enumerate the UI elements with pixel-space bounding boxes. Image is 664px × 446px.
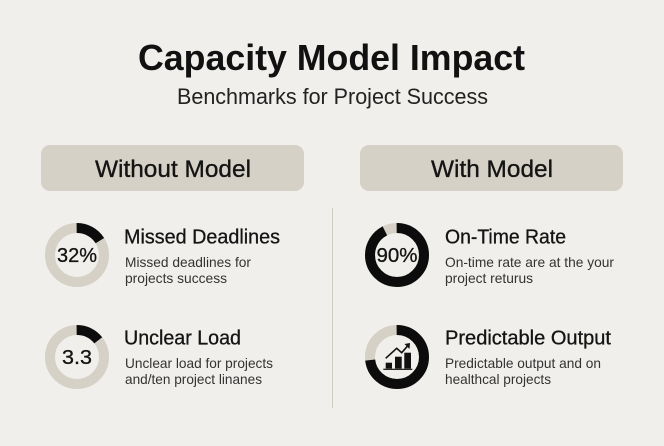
metric: Missed Deadlines: projects success: [125, 270, 227, 286]
metric: Predictable Output: [370, 328, 611, 387]
metric: On-Time Rate: On-Time Rate: [445, 226, 566, 248]
metric: Unclear Load: Unclear load for projects: [125, 355, 273, 371]
metric: Missed Deadlines: [50, 226, 280, 286]
metric: Predictable Output: Predictable Output: [445, 328, 611, 350]
metric: On-Time Rate: On-time rate are at the your: [445, 254, 614, 270]
icon: rising bar chart: [383, 343, 412, 370]
column header: With Model: [360, 145, 623, 191]
donut: 3.3: 3.3: [62, 347, 92, 369]
metric: Unclear Load: and/ten project linanes: [125, 371, 262, 387]
column header: With Model: With Model: [431, 156, 553, 183]
subtitle: Benchmarks for Project Success: [177, 84, 488, 109]
metric: On-Time Rate: [370, 226, 614, 286]
column header: Without Model: [41, 145, 304, 191]
column header: Without Model: Without Model: [95, 156, 251, 183]
donut: 3.3: [50, 330, 104, 384]
metric: Predictable Output: healthcal projects: [445, 371, 551, 387]
metric: Unclear Load: [50, 328, 273, 387]
donut: 32%: [50, 228, 104, 282]
metric: Predictable Output: Predictable output and on: [445, 355, 601, 371]
donut: 32%: 32%: [57, 245, 97, 267]
metric: Missed Deadlines: Missed deadlines for: [125, 254, 251, 270]
title: Capacity Model Impact: [138, 37, 525, 78]
donut: 90%: [370, 228, 424, 282]
metric: Missed Deadlines: Missed Deadlines: [124, 226, 280, 248]
metric: On-Time Rate: project returus: [445, 270, 533, 286]
donut: 90%: 90%: [376, 245, 418, 267]
donut: chart icon: [370, 330, 424, 384]
metric: Unclear Load: Unclear Load: [124, 328, 241, 350]
